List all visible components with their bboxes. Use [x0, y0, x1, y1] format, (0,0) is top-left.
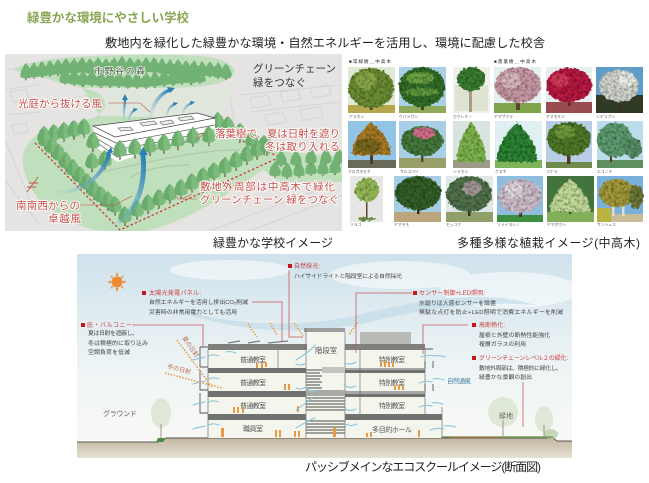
photo: ソメイヨシノ — [497, 176, 543, 227]
site boundary — [35, 140, 280, 230]
callout: balcony: 庇・バルコニー: — [87, 321, 134, 329]
label: perimeter planting: グリーンチェーン 緑をつなぐ — [200, 193, 339, 206]
panel: passive eco-school section — [77, 254, 580, 458]
photo: ヤマモミジ — [546, 67, 592, 119]
balconies — [200, 347, 433, 413]
photo: ソヨゴ — [350, 176, 383, 227]
label: deciduous trees — [215, 127, 340, 153]
photo: サンシュユ — [597, 176, 643, 227]
callout: green chain level 2: 緑豊かな景観の創出 — [479, 373, 532, 381]
school section drawing — [200, 328, 442, 438]
clouds — [170, 260, 580, 308]
caption: planting image: 多種多様な植栽イメージ(中高木) — [457, 235, 640, 250]
callout: solar panels: 災害時の非常用電力としても活用 — [149, 308, 237, 316]
photo: ウバメガシ — [399, 67, 446, 119]
label: summer sun: 夏の日射 — [180, 335, 201, 359]
caption: school image: 緑豊かな学校イメージ — [213, 235, 333, 250]
roof panels — [228, 341, 288, 343]
rear and side trees — [37, 112, 271, 216]
forest label: 市野谷の森 — [94, 65, 145, 76]
callout: daylight — [288, 262, 402, 280]
caption: section image: パッシブメインなエコスクールイメージ(断面図) — [305, 459, 541, 474]
photo: ヤマザクラ: ヤマザクラ — [494, 114, 513, 119]
callout: solar panels: 自然エネルギーを活用し排出CO₂削減 — [149, 298, 248, 306]
pale ground behind building — [230, 95, 231, 96]
photo: モッコク — [446, 176, 493, 227]
label: green space: 緑地 — [499, 411, 513, 420]
front trees — [85, 126, 345, 226]
road marks in site — [100, 150, 240, 178]
callout: solar panels: 太陽光発電パネル: — [149, 289, 201, 297]
room labels: 普通教室 — [240, 355, 266, 364]
callout: solar panels — [142, 289, 248, 316]
sunlight rays — [165, 323, 357, 388]
callout: balcony: 夏は日射を遮蔽し、 — [88, 329, 138, 337]
photo: シデコブシ — [596, 67, 643, 119]
photo: ヤマモモ — [394, 176, 441, 227]
photo: クヌギ — [495, 121, 542, 174]
room labels: 特別教室 — [379, 401, 405, 410]
photo: エゴノキ: エゴノキ — [597, 169, 612, 174]
callout: insulation — [472, 321, 550, 348]
photo: ウバメガシ: ウバメガシ — [399, 114, 418, 119]
photo: サルスベリ — [399, 121, 446, 174]
photo: コナラ: コナラ — [546, 169, 558, 174]
label: ground: グラウンド — [103, 409, 137, 418]
photo: アラカシ: アラカシ — [349, 114, 364, 119]
photo: サルスベリ: サルスベリ — [400, 169, 419, 174]
photo: コナラ — [546, 121, 592, 174]
room labels: 階段室 — [315, 346, 337, 355]
label: deciduous trees: 冬は取り入れる — [265, 140, 340, 153]
photo: ヤマザクラ — [494, 67, 541, 119]
callout: insulation: 高断熱化: — [479, 321, 505, 329]
photo: カクレミノ — [453, 67, 490, 119]
green area — [13, 55, 342, 231]
photo: モッコク: モッコク — [446, 222, 461, 227]
icon: sun — [107, 272, 127, 292]
photo: エゴノキ — [597, 121, 643, 174]
callout: sensor and LED: センサー制御+LED照明: — [419, 289, 485, 297]
wind arrows — [57, 90, 192, 227]
label: natural ventilation: 自然通風 — [447, 376, 472, 385]
label: prevailing wind: 卓越風 — [48, 212, 82, 225]
callout: sensor and LED: 水廻りは人感センサーを設置 — [419, 299, 496, 307]
label: winter sun: 冬の日射 — [166, 362, 192, 376]
callout: sensor and LED — [413, 289, 563, 316]
trees in section — [151, 397, 558, 442]
room labels — [240, 346, 412, 434]
label: green chain — [253, 62, 336, 89]
callout: insulation: 屋根と外壁の断熱性能強化 — [479, 331, 550, 339]
photo: シラカシ — [453, 121, 490, 174]
callout: green chain level 2 — [472, 354, 568, 381]
stairs — [306, 370, 345, 433]
room labels: 多目的ホール — [372, 425, 412, 434]
photo: サンシュユ: サンシュユ — [597, 222, 616, 227]
photo: クヌギ: クヌギ — [495, 169, 507, 174]
label: prevailing wind: 南南西からの — [16, 199, 80, 212]
ground — [77, 438, 572, 458]
callout: daylight: 自然採光: — [294, 262, 320, 270]
subtitle: 敷地内を緑化した緑豊かな環境・自然エネルギーを活用し、環境に配慮した校舎 — [105, 35, 545, 50]
photo: ヤマボウシ: ヤマボウシ — [547, 222, 566, 227]
photo: ヤマモミジ: ヤマモミジ — [546, 114, 565, 119]
label: perimeter planting: 敷地外周部は中高木で緑化 — [200, 180, 336, 193]
label: perimeter planting — [200, 180, 339, 206]
header: evergreen: ■常緑樹＿中高木 — [349, 58, 392, 65]
callout: daylight: ハイサイドライトと階段室による自然採光 — [294, 272, 402, 280]
title: 緑豊かな環境にやさしい学校 — [27, 10, 189, 25]
panel: green school site map — [5, 54, 345, 231]
label: wind from courtyard: 光庭から抜ける風 — [18, 97, 102, 110]
school building — [93, 113, 215, 162]
header: deciduous: ■落葉樹＿中高木 — [494, 58, 536, 65]
photo: ソヨゴ: ソヨゴ — [350, 222, 362, 227]
wind currents — [193, 345, 456, 430]
label: prevailing wind — [16, 199, 82, 225]
wind symbol — [27, 177, 38, 192]
label: green chain: 緑をつなぐ — [253, 76, 306, 89]
photo: クロガネモチ — [348, 121, 396, 174]
people — [221, 361, 420, 437]
callout: insulation: 複層ガラスの利用 — [479, 340, 526, 348]
photo: クロガネモチ: クロガネモチ — [348, 169, 371, 174]
photo: カクレミノ: カクレミノ — [453, 114, 472, 119]
arrowheads — [105, 87, 195, 155]
photo: ヤマボウシ — [547, 176, 594, 227]
callout: balcony: 冬は積極的に取り込み — [88, 339, 148, 347]
forest trees — [20, 56, 232, 89]
callout leaders — [133, 270, 523, 427]
photo: シデコブシ: シデコブシ — [596, 114, 615, 119]
sky — [77, 254, 572, 440]
photo: シラカシ: シラカシ — [453, 169, 468, 174]
callout: green chain level 2: グリーンチェーンレベル２の緑化: — [479, 354, 568, 362]
room labels: 特別教室 — [379, 378, 405, 387]
photo: アラカシ — [348, 67, 395, 119]
panel: tree photo catalogue — [348, 58, 643, 227]
photo: ソメイヨシノ: ソメイヨシノ — [497, 222, 520, 227]
label: green chain: グリーンチェーン — [253, 62, 336, 75]
room labels: 普通教室 — [240, 378, 266, 387]
room labels: 特別教室 — [379, 355, 405, 364]
callout: balcony: 空調負荷を低減 — [88, 348, 130, 356]
leader lines — [80, 103, 206, 205]
photo: ヤマモモ: ヤマモモ — [394, 222, 409, 227]
label: deciduous trees: 落葉樹で、夏は日射を遮り — [215, 127, 340, 140]
room labels: 普通教室 — [240, 401, 266, 410]
callout: green chain level 2: 敷地外周部は、積極的に緑化し、 — [479, 364, 562, 372]
callout: sensor and LED: 無駄な点灯を防止+LED照明で消費エネルギーを削減 — [419, 308, 563, 316]
callout: balcony — [81, 321, 148, 356]
room labels: 職員室 — [243, 424, 263, 433]
